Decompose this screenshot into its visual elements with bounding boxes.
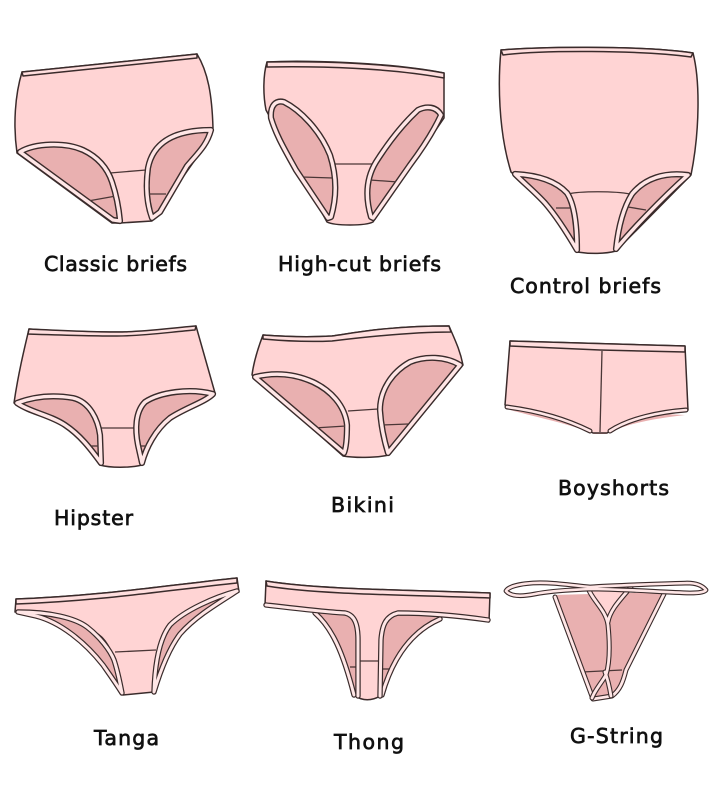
label: High-cut briefs (278, 252, 441, 276)
body panel (14, 326, 215, 467)
seams on inner fabric (350, 667, 392, 669)
body panel (15, 54, 213, 223)
right leg opening (147, 130, 211, 218)
body panel (15, 578, 239, 695)
waistband (28, 326, 196, 336)
waist strap (506, 583, 706, 596)
label: Boyshorts (558, 476, 669, 500)
label: G-String (570, 724, 663, 748)
right lower band (380, 613, 488, 696)
waistband (266, 581, 490, 598)
gusset seam (335, 163, 372, 165)
garment: g-string (506, 583, 706, 748)
garment: control briefs (499, 47, 698, 298)
right leg opening (154, 591, 237, 692)
garment: boyshorts (505, 341, 688, 500)
gusset seam (360, 660, 380, 662)
body panel (265, 581, 490, 700)
body panel (499, 47, 698, 253)
waistband (501, 47, 693, 57)
garment: tanga (15, 578, 239, 750)
right leg opening (380, 358, 460, 453)
right leg opening (616, 174, 688, 249)
left leg band (315, 613, 354, 695)
right leg opening (136, 391, 213, 463)
gusset seam (568, 192, 630, 194)
label: Classic briefs (44, 252, 187, 276)
gusset seam (348, 409, 378, 411)
waistband (22, 54, 197, 76)
right inner fabric (381, 612, 442, 696)
gusset seam (101, 427, 134, 429)
label: Tanga (93, 726, 159, 750)
garment: thong (265, 581, 490, 754)
right leg hem (610, 410, 686, 431)
center seam (600, 351, 602, 432)
body panel (252, 326, 463, 457)
gusset seam (582, 670, 622, 672)
gusset seam (115, 650, 156, 652)
left lower band (266, 605, 358, 696)
label: Thong (333, 730, 404, 754)
pouch (553, 592, 666, 701)
garment: classic briefs (15, 54, 213, 276)
left leg opening (515, 174, 577, 250)
left leg opening (255, 374, 347, 453)
pouch edge (555, 594, 664, 699)
top triangle (588, 588, 630, 618)
sliver under hems (510, 410, 685, 434)
label: Bikini (331, 493, 394, 517)
left inner fabric (313, 612, 358, 696)
body panel (264, 61, 444, 225)
left leg opening (271, 102, 335, 218)
right leg opening (367, 107, 441, 218)
waistband (263, 326, 451, 341)
waistband (267, 62, 444, 78)
body panel (505, 341, 688, 433)
garment: bikini (252, 326, 463, 517)
waistband (16, 578, 237, 604)
y-strap (588, 587, 631, 698)
left leg opening (18, 612, 122, 693)
garment: hipster (14, 326, 215, 530)
left leg hem (507, 407, 590, 431)
left leg opening (17, 396, 101, 463)
right leg band (382, 619, 440, 695)
garment: high-cut briefs (264, 61, 444, 276)
gusset seam (110, 170, 146, 173)
left leg opening (20, 145, 120, 221)
label: Hipster (54, 506, 134, 530)
waistband (510, 341, 685, 352)
label: Control briefs (510, 274, 661, 298)
